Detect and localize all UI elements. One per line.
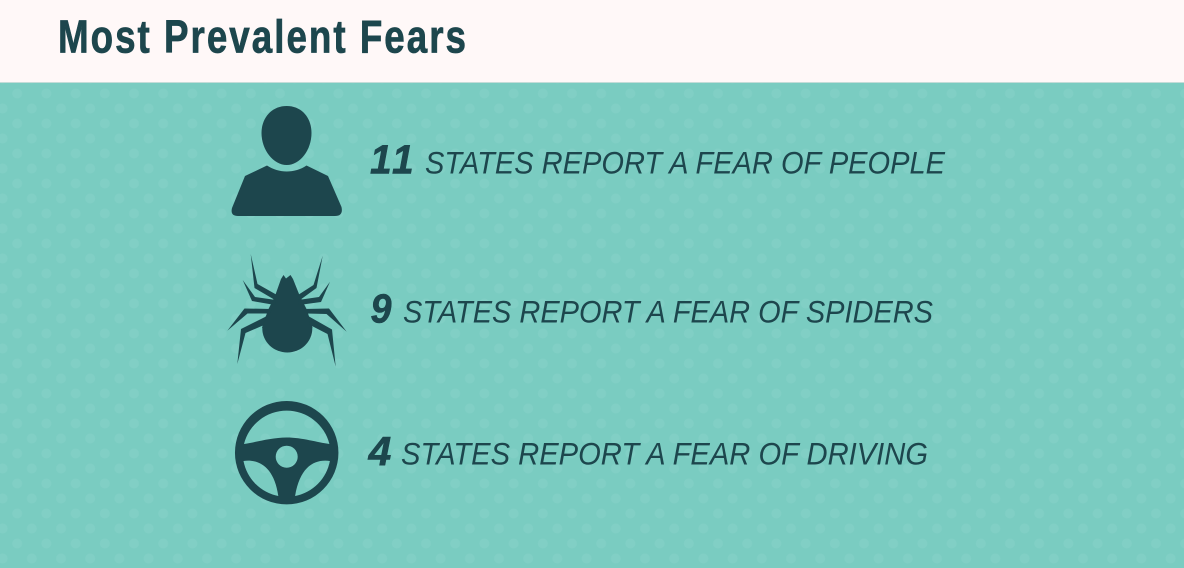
text: states report fear of spiders: STATES REPORT A FEAR OF SPIDERS xyxy=(403,294,933,330)
icon: steering wheel xyxy=(235,401,338,504)
text: states report fear of people: STATES REPORT A FEAR OF PEOPLE xyxy=(425,144,946,180)
row: fear of driving xyxy=(235,401,928,504)
row: fear of people xyxy=(232,106,946,216)
number: 9: 9 xyxy=(370,286,392,332)
icon: person xyxy=(232,106,342,216)
icon: spider xyxy=(227,254,347,367)
number: 11: 11 xyxy=(370,138,414,183)
header band xyxy=(0,0,1184,83)
title: Most Prevalent Fears xyxy=(58,10,466,62)
text: states report fear of driving: STATES REPORT A FEAR OF DRIVING xyxy=(401,436,928,472)
number: 4: 4 xyxy=(368,428,392,474)
row: fear of spiders xyxy=(227,254,933,367)
